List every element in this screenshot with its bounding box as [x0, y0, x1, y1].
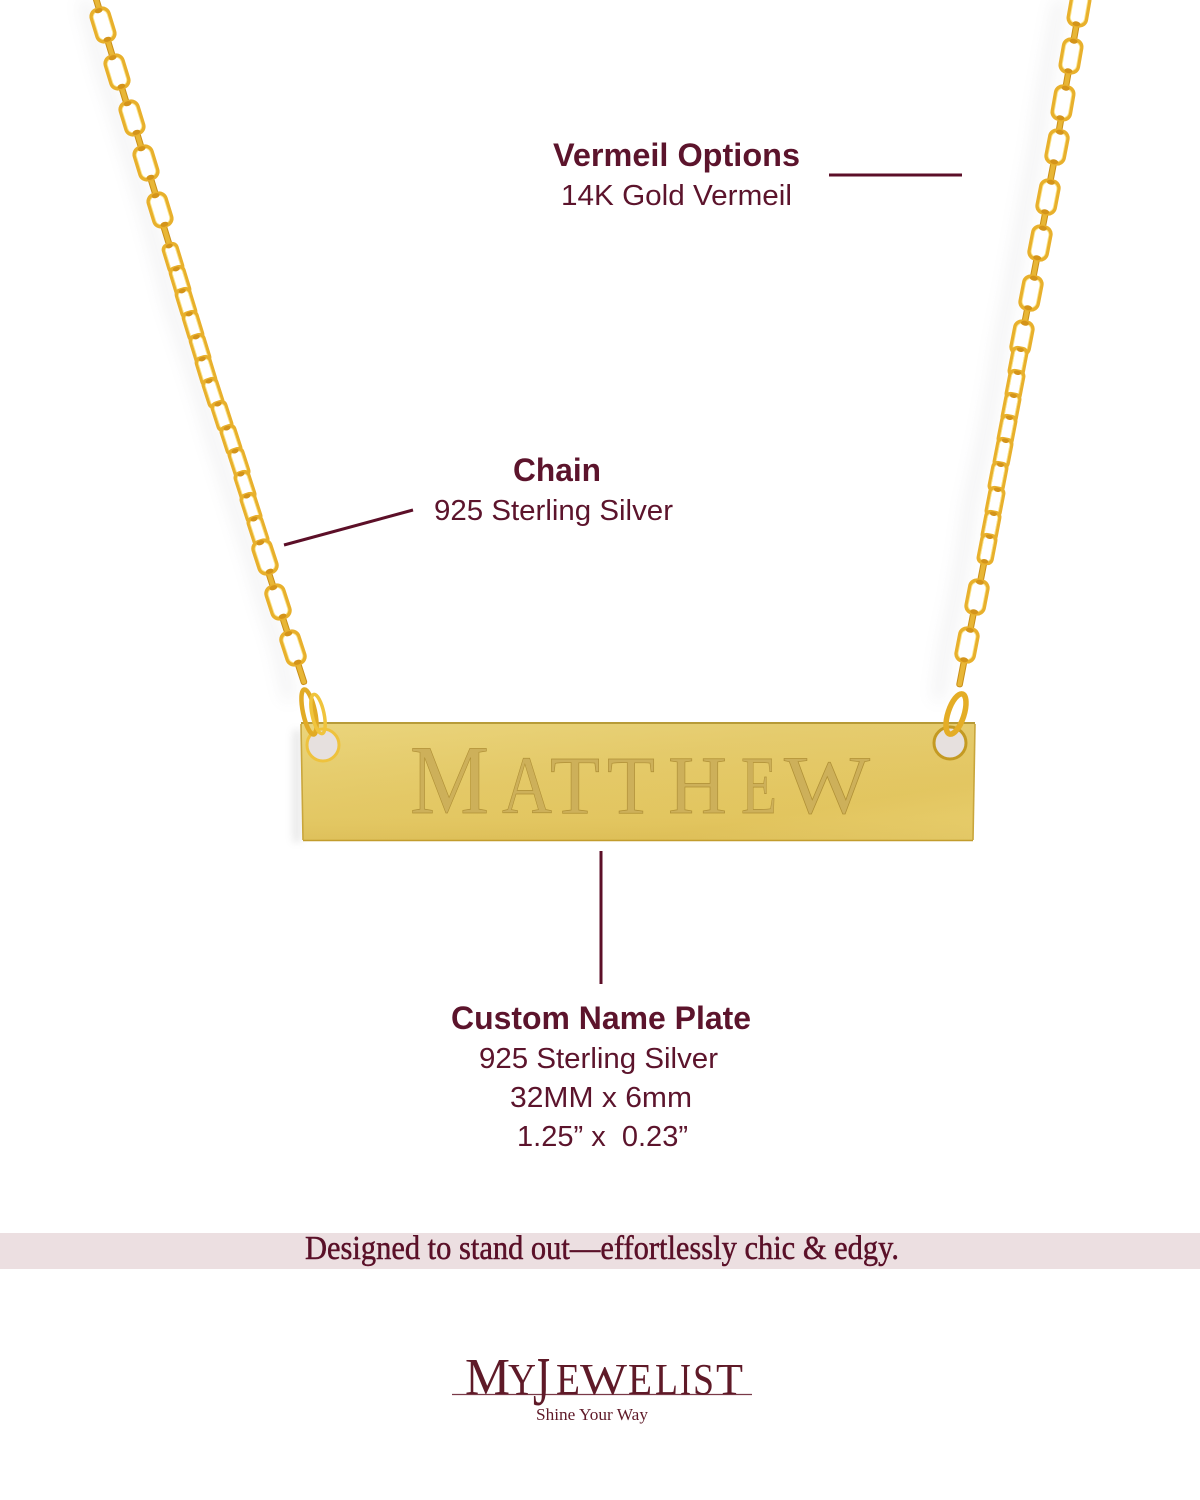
logo	[452, 1344, 752, 1424]
callout: chain	[284, 452, 673, 545]
leader line	[829, 174, 962, 176]
plate hole left	[307, 729, 339, 761]
wordmark: S	[693, 1355, 714, 1404]
left chain	[84, 0, 307, 700]
tagline band: Designed to stand out—effortlessly chic & edgy.	[305, 1230, 899, 1267]
wordmark: E	[556, 1355, 580, 1404]
wordmark: I	[680, 1355, 691, 1404]
wordmark: E	[628, 1355, 652, 1404]
wordmark: W	[580, 1355, 628, 1404]
jump ring left	[298, 688, 328, 736]
material: 925 Sterling Silver	[479, 1043, 718, 1075]
engraved name: A	[502, 739, 552, 831]
engraved name: H	[668, 739, 727, 831]
engraved name: M	[410, 726, 489, 835]
logo rule	[452, 1394, 752, 1396]
imperial size: 1.25” x 0.23”	[517, 1121, 688, 1153]
logo tagline: Shine Your Way	[536, 1405, 648, 1424]
engraved name: T	[607, 739, 655, 831]
metric size: 32MM x 6mm	[510, 1082, 692, 1114]
engraved name	[410, 726, 871, 835]
engraved name: T	[550, 739, 600, 831]
leader line	[284, 510, 413, 545]
wordmark: Y	[508, 1355, 536, 1404]
detail: 925 Sterling Silver	[434, 495, 673, 527]
jump ring right	[942, 692, 970, 736]
wordmark: M	[465, 1349, 510, 1406]
leader line	[600, 851, 602, 984]
heading: Chain	[513, 452, 601, 488]
wordmark: J	[533, 1344, 550, 1421]
heading: Vermeil Options	[553, 137, 800, 173]
heading: Custom Name Plate	[451, 1000, 751, 1036]
plate hole right	[934, 727, 966, 759]
wordmark: T	[716, 1355, 743, 1404]
detail: 14K Gold Vermeil	[561, 180, 792, 212]
name plate	[293, 722, 975, 842]
right chain	[938, 0, 1091, 700]
engraved name: W	[784, 739, 871, 831]
wordmark	[465, 1344, 743, 1421]
callout: custom name plate	[451, 851, 751, 1153]
callout: vermeil options	[553, 137, 962, 212]
tagline band	[0, 1230, 1200, 1269]
wordmark: L	[655, 1355, 678, 1404]
engraved name: E	[741, 739, 777, 831]
